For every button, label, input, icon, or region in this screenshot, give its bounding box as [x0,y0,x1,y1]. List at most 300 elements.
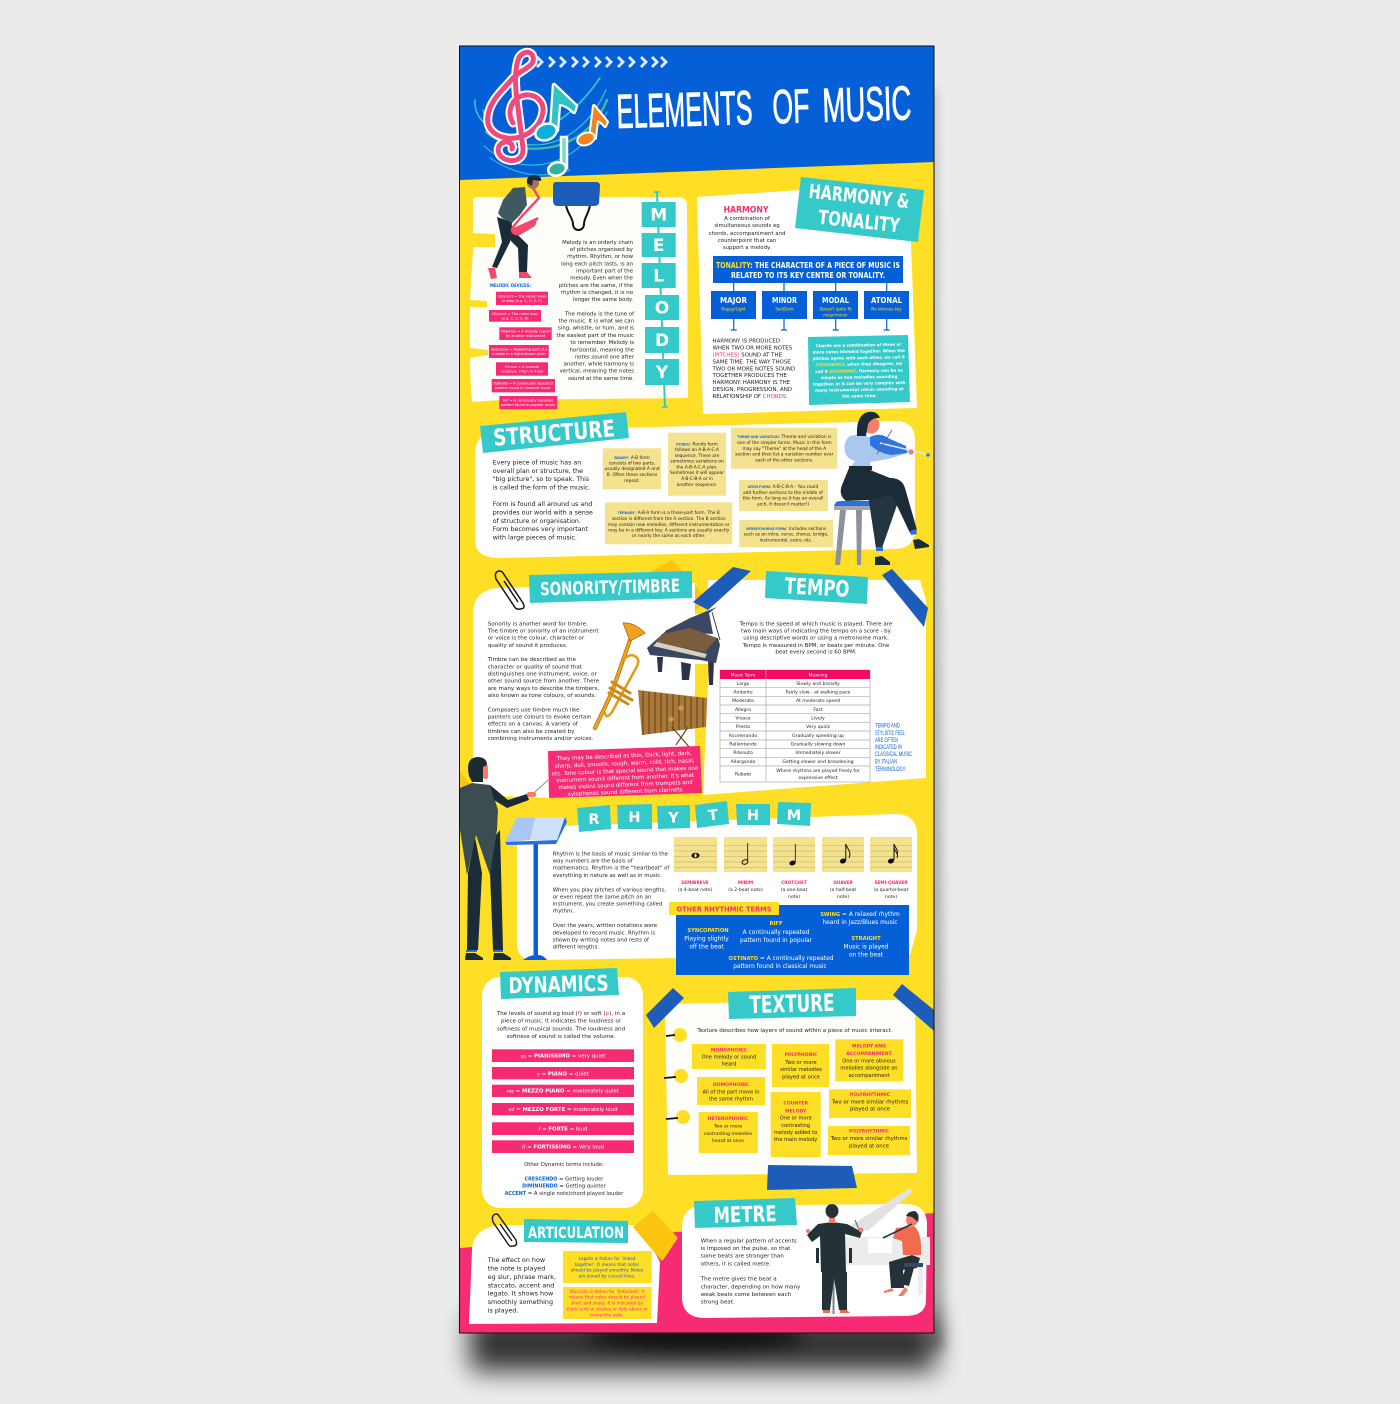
form cards: one of the simpler forms. Music in this form [737,440,832,446]
texture cards: Two or more similar rhythms [830,1136,908,1142]
note value labels: note) [788,894,800,900]
harmony paragraph: RELATIONSHIP OF CHORDS. [712,394,788,400]
panel: articulation [469,1213,676,1324]
metre text: weak beats come between each [701,1292,792,1298]
form cards: section is different from the A section. The B section [612,516,726,522]
melody text: rhythm. Rhythm, or how [567,254,634,260]
metre text: is imposed on the pulse, so that [701,1246,791,1252]
tonality categories [711,291,909,319]
dynamics bars: ff = FORTISSIMO = Very loud [522,1144,604,1151]
pink timbre callout: sharp, dull, smooth, rough, warm, cold, rich, nasal, [555,758,695,770]
sonority text: also known as tone colours, of sounds. [488,693,596,699]
dynamics intro: The levels of sound eg loud (f) or soft (p), in a [496,1011,625,1017]
conductor coat [460,783,498,875]
harmony paragraph: HARMONY. HARMONY IS THE [712,380,791,386]
treble clef [488,52,543,160]
form cards: this form. As long as it has an overall [743,496,823,502]
tempo table: Largo [737,681,750,687]
texture cards: COUNTER [783,1101,808,1107]
melody text: vertical, meaning the notes [560,369,634,375]
title: OF [772,80,810,134]
form cards: A-B-C-B-A or in [681,476,713,482]
rhythm text: instrument, you create something called [553,902,662,908]
sonority text: Timbre can be described as the [487,657,577,663]
melody vertical letters: M [650,206,667,226]
structure text: Form becomes very important [493,526,589,533]
tempo side note: ARE OFTEN [875,737,898,744]
sonority text: timbres can also be created by [488,729,575,735]
articulation text: staccato, accent and [488,1282,554,1290]
melodic device tags: Phrase = A musical [505,365,539,369]
back leg [868,495,897,548]
tempo text: beat every second is 60 BPM. [775,650,857,656]
tempo text: two main ways of indicating the tempo on a score - by [741,628,892,634]
quaver [839,844,850,864]
texture cards: HOMOPHONIC [713,1082,750,1088]
texture cards: played at once [850,1107,891,1113]
trumpet [595,623,645,728]
form cards: THEME AND VARIATION: Theme and variation is [737,434,832,440]
chords callout: many instrumental voices sounding at [815,386,904,393]
pink timbre callout [548,746,702,798]
hand and baton [527,792,536,797]
tempo side note: STYLISTIC FEEL [875,730,905,737]
rhythm text: developed to record music. Rhythm is [553,930,655,936]
tempo table: Moderato [732,698,754,704]
form cards: repeat. [624,478,640,484]
dynamics intro: softness of musical sounds. The loudness and [497,1026,626,1032]
saxophone player [488,175,541,279]
melody text: longer the same body. [573,297,633,303]
melody text: long each pitch lasts, is an [561,261,633,267]
double note [533,85,576,143]
paperclip icon [492,1214,517,1246]
articulation text: eg slur, phrase mark, [488,1273,556,1281]
note value labels [678,880,909,900]
melodic device tags: Sequence = Repeating part of a [491,347,547,351]
poster drop shadow [470,90,944,1371]
conductor with music stand [460,757,567,960]
rhythm letter tags: R [588,812,600,828]
piano backdrop [843,1188,930,1295]
stool [834,501,876,565]
form cards: may contain new melodies, different instrumentation or [608,522,730,528]
tonality categories: MAJOR [720,296,747,305]
sonority text: distinguishes one instrument, voice, or [488,671,597,677]
other rhythmic terms box: A continually repeated [743,930,810,936]
articulation text: The effect on how [487,1256,545,1264]
harmony paragraph: TOGETHER PRODUCES THE [712,373,787,379]
head and hair [866,418,880,434]
music stand [505,817,567,960]
rhythm letter tags: H [747,808,759,824]
articulation text: the note is played [488,1264,545,1272]
note value labels: MINIM [738,880,753,886]
texture cards: the same rhythm [709,1097,753,1103]
texture cards: MONOPHONIC [711,1047,748,1053]
articulation text: smoothly something [488,1298,553,1306]
structure text: Form is found all around us and [493,501,592,508]
sonority text: The timbre or sonority of an instrument [487,628,599,634]
melodic device tags: sentence. Often in 4-bar [501,369,544,373]
melody text: sound at the same time. [568,376,634,382]
tempo tag: TEMPO [784,574,850,603]
pink footer background [460,1213,934,1333]
other dynamic terms: ACCENT = A single note/chord played louder [505,1191,624,1197]
melody vertical letters: O [655,298,669,318]
harmony tag [795,177,924,242]
form cards: may say "Theme" at the head of the A [742,446,826,452]
tempo table: Ritenuto [733,750,753,756]
melody text: The melody is the tune of [564,311,634,317]
melodic device tags: Imitation = A melody copied [500,330,551,334]
form cards: add further sections to the middle of [743,490,823,496]
melody text: pitches are the same, if the [559,283,634,289]
other rhythmic terms box: heard in Jazz/Blues music [822,920,898,926]
other rhythmic terms box: Music is played [843,944,889,950]
form cards: RONDO: Rondo form [676,442,718,448]
other rhythmic terms box: pattern found in classical music [733,964,827,970]
sonority text [487,621,600,742]
form cards: another sequence. [677,482,717,488]
flute player [883,1211,923,1296]
melodic device tags: (e.g. C, G, E, B) [502,317,529,321]
melody text [556,240,635,382]
articulation text: legato. It shows how [488,1290,553,1298]
tempo table: Immediately slower [795,750,841,756]
other rhythmic terms box: pattern found in popular [740,938,813,944]
form cards: Sometimes it will appear [670,470,724,476]
harmony definition: counterpoint that can [718,238,776,244]
panel: tempo [690,567,928,795]
texture cards: accompaniment [848,1073,890,1079]
chords callout: more notes blended together. When the [812,348,905,355]
melodic device tags: Ostinato = A continually repeated [493,381,553,385]
rhythm text: everything in nature as well as in music. [553,873,662,879]
tempo table: Allargando [731,759,756,765]
tempo table: Meaning [809,672,828,678]
chords callout [808,335,910,405]
legato card: Legato is Italian for 'linked [579,1256,636,1262]
structure tag: STRUCTURE [492,416,616,452]
shirt [844,434,909,466]
clip icon [553,182,600,230]
harmony paragraph: (PITCHES) SOUND AT THE [712,353,783,359]
harmony definition: A combination of [724,216,770,222]
note value labels: (a 4-beat note) [678,887,713,893]
legato card [563,1251,652,1283]
melody text: another, while harmony is [564,362,634,368]
tempo table: Gradually speeding up [792,733,844,739]
tempo table: Vivace [735,715,751,721]
melody text: rhythm is changed, it is no [561,290,633,296]
form cards: usually designated A and [605,466,660,472]
other rhythmic terms box: off the beat [689,944,724,950]
tonality banner: RELATED TO ITS KEY CENTRE OR TONALITY. [731,271,885,280]
rhythm text: different lengths. [553,945,599,951]
texture cards: the main melody [774,1137,817,1143]
shoes [465,953,511,960]
texture cards: Two or more [713,1124,742,1130]
melody vertical letters [642,192,679,407]
panel: dynamics [482,968,643,1208]
structure text: of structure or organisation. [493,518,581,525]
melodic device tags [489,292,557,409]
texture cards: POLYRHYTHMIC [850,1092,891,1098]
texture cards: melody added to [774,1130,817,1136]
harmony definition: support a melody. [723,245,771,251]
tempo table: expressive effect [798,775,838,781]
texture cards: heard [722,1062,736,1068]
structure text: Every piece of music has an [493,460,581,466]
other rhythmic terms box [669,902,909,975]
rhythm text: shown by writing notes and rests of [553,937,649,943]
form cards: or nearly the same as each other. [632,533,705,539]
rhythm text [553,851,669,951]
panel: harmony and tonality [697,177,924,414]
tonality connectors [731,283,890,330]
pink timbre callout: etc. Tone colour is that special sound that makes one [552,766,699,777]
staccato card [563,1287,652,1319]
violin and bow [870,435,907,455]
panel: sonority and timbre [473,571,695,798]
tempo table: Allegro [735,707,751,713]
rhythm letter tags: M [787,808,801,824]
texture cards: MELODY AND [852,1044,886,1050]
tempo table: Accelerando [729,733,757,739]
tonality categories: MODAL [822,296,849,305]
rhythm letter tags: H [628,810,641,826]
harmony paragraph: WHEN TWO OR MORE NOTES [712,346,793,352]
note value labels: (a 2-beat note) [728,887,763,893]
chords callout: pitches agree with each other, we call it [813,354,905,361]
texture cards: One melody or sound [702,1055,756,1061]
dynamics tag: DYNAMICS [508,972,609,999]
melody text: horizontal, meaning the [570,347,635,353]
melody text: the easiest part of the music [556,333,634,339]
other rhythmic terms box: on the beat [849,952,884,958]
metre text: strong beat. [701,1300,735,1306]
chords callout: call it DISSONANT. Harmony can be as [815,368,903,374]
melody vertical letters: E [653,236,665,256]
rhythm letter tags: T [707,808,719,824]
paperclip icon [495,571,524,609]
pink timbre callout: makes violins sound different from trumpets and [558,780,693,791]
sonority tag [529,571,692,603]
melody text: melody. Even when the [570,276,634,282]
harmony paragraph: HARMONY IS PRODUCED [712,339,780,345]
dynamics intro [496,1011,626,1040]
other dynamic terms: Other Dynamic terms include: [524,1162,604,1168]
tempo table: Getting slower and broadening [782,759,854,765]
rhythm text: Rhythm is the basis of music similar to the [553,851,669,857]
melody text: the music. It is what we can [559,318,634,324]
melody text: of pitches organised by [570,247,634,253]
form cards: sequence. There are [675,453,720,459]
melodic device tags: Conjunct = The notes move [498,294,546,298]
legato card: are joined by curved lines. [579,1274,635,1280]
tempo table: Very quick [806,724,830,730]
melody white sheet [470,197,688,402]
tempo table: Rallentando [729,742,757,748]
staccato card: Staccato is Italian for 'detached'. It [569,1289,645,1295]
melodic device tags: Riff = A continually repeated [503,398,553,402]
texture cards: played at once [782,1074,820,1080]
texture cards: melodies alongside an [840,1066,898,1072]
melodic device tags: melody in a higher/lower pitch [492,352,546,356]
conductor arm [490,785,529,808]
texture cards: played at once [849,1143,890,1149]
staccato card: below the note. [590,1312,624,1318]
pink timbre callout: They may be described as thin, thick, light, dark, [556,751,692,762]
texture cards: Two or more similar rhythms [831,1100,909,1106]
tempo side note [875,722,912,773]
other rhythmic terms box: OSTINATO = A continually repeated [729,956,834,962]
harmony definition: simultaneous sounds eg [714,223,780,229]
dynamics intro: piece of music. It indicates the loudness or [501,1019,622,1025]
dynamics bars: f = FORTE = loud [539,1126,587,1132]
texture cards: ACCOMPANIMENT [846,1051,893,1057]
texture cards: POLYPHONIC [785,1052,818,1058]
harmony tag: TONALITY [817,206,902,237]
xylophone [638,690,707,748]
binder holes [664,1028,690,1124]
other rhythmic terms box: RIFF [769,921,783,927]
piano [647,607,720,685]
tempo table: Gradually slowing down [791,742,846,748]
metre text: The metre gives the beat a [700,1276,777,1282]
staves [475,78,607,175]
melodic device tags: Disjunct = The notes leap [492,312,538,316]
other dynamic terms [505,1162,624,1197]
form cards: BINARY: A-B form [614,455,650,461]
note value labels: CROTCHET [781,880,807,886]
tempo table: Music Term [731,672,755,678]
melody vertical letters: L [653,266,664,286]
melody text: to remember. Melody is [570,340,634,346]
orange note [575,106,607,148]
tonality categories: No obvious key [871,306,902,312]
sonority text: painters use colours to evoke certain [488,714,592,720]
dynamics intro: softness of sound is called the volume. [506,1034,616,1040]
texture cards: One or more [780,1116,812,1122]
tempo table: Slowly and broadly [796,681,840,687]
form cards: instrumental, outro, etc. [760,538,812,544]
other dynamic terms: CRESCENDO = Getting louder [525,1176,604,1182]
sonority text: Sonority is another word for timbre. [488,621,588,627]
tempo side note: CLASSICAL MUSIC [875,751,912,758]
sonority text: quality of sound it produces. [488,643,568,649]
dynamics bars [492,1049,634,1153]
panel: metre [682,1188,930,1318]
melody text: Melody is an orderly chain [562,240,633,246]
melodic device tags: pattern found in popular music [501,403,555,407]
structure text: "big picture", so to speak. This [493,476,589,483]
tonality banner: TONALITY: THE CHARACTER OF A PIECE OF MUSIC IS [716,261,900,270]
metre text [700,1238,801,1306]
harmony paragraph [712,339,795,400]
yellow background [460,162,934,1248]
form cards [603,428,837,547]
harmony definition [709,216,785,251]
rhythm text: rhythm. [553,909,574,915]
panel: melody [470,175,688,409]
front leg [841,468,917,533]
tempo side note: BY ITALIAN [875,758,897,766]
texture cards: One or more obvious [842,1059,896,1065]
melody vertical letters: Y [655,363,669,383]
title [618,86,911,128]
other dynamic terms: DIMINUENDO = Getting quieter [522,1184,607,1190]
note value labels: QUAVER [833,880,853,886]
harmony tag: HARMONY & [808,180,910,213]
tonality categories: ATONAL [871,296,902,305]
dynamics bars: mp = MEZZO PIANO = moderately quiet [507,1089,619,1095]
metre text: some beats are stronger than [701,1254,784,1260]
tape strips [693,567,928,627]
note value labels: SEMIBREVE [681,880,709,886]
white bridge between panels [690,614,710,666]
melodic device tags: in step (e.g. C, D, E, F) [502,299,542,303]
sonority text: other sound source from another. There [488,679,600,685]
conductor legs [467,830,503,950]
staccato card: means that notes should be played [569,1295,645,1301]
texture cards: heard at once [712,1138,744,1144]
metre text: others, it is called metre. [701,1261,771,1267]
head [468,757,488,782]
tempo table: At moderate speed [796,698,840,704]
metre text: character, depending on how many [701,1284,801,1290]
panel: texture [646,984,934,1190]
rhythm text: or even repeat the same pitch on an [553,894,651,900]
texture tag: TEXTURE [749,989,835,1019]
chords callout: together, or it can be very complex with [813,380,906,387]
form cards: consists of two parts, [609,460,655,466]
panel: rhythm [517,801,917,975]
texture cards: HETEROPHONIC [708,1116,749,1122]
articulation tag [524,1219,628,1243]
note value labels: SEMI-QUAVER [874,880,908,886]
melody text: sing, whistle, or hum, and is [558,326,634,332]
texture cards: contrasting [781,1123,810,1129]
poster [460,46,934,1333]
other rhythmic terms box: STRAIGHT [851,936,881,942]
texture cards: MELODY [785,1108,807,1114]
poster border [460,46,934,1333]
legato card: should be played smoothly. Notes [571,1268,644,1274]
gold shape behind sonority panel [650,560,708,622]
harmony paragraph: DESIGN, PROGRESSION, AND [712,387,792,393]
harmony heading: HARMONY [724,206,769,216]
note value labels: (a one-beat [781,887,808,893]
texture cards: All of the part move in [702,1089,760,1095]
metre text: When a regular pattern of accents [701,1238,797,1244]
melodic device tags: by another instrument [506,334,546,338]
tempo table: Rubato [735,772,751,778]
tempo table: Lively [811,715,825,721]
form cards: may be in a different key. A sections are usually exactly [608,528,730,534]
form cards: section and then list a variation number over [735,452,834,458]
texture intro: Texture describes how layers of sound within a piece of music interact. [696,1028,893,1034]
texture tape [646,984,934,1190]
note value labels: note) [837,894,849,900]
gold note shape [635,1213,676,1259]
melody text: notes sound one after [575,354,635,360]
melodic device tags: pattern found in classical music [495,386,551,390]
tempo table [720,670,870,782]
tempo table: Fast [813,707,823,713]
tempo text: Tempo is measured in BPM, or beats per minute. One [742,643,890,649]
